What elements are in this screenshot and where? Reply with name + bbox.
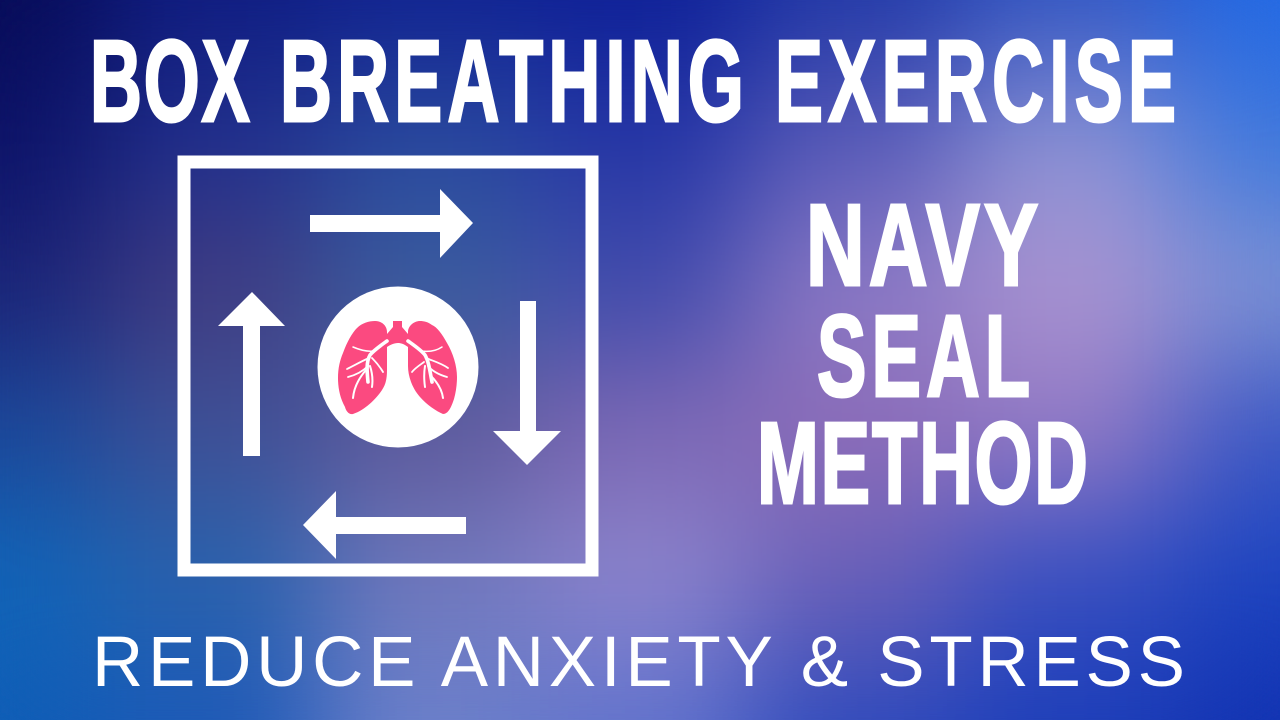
title: EXERCISE	[775, 18, 1181, 146]
word: navy: NAVY	[806, 181, 1042, 310]
subtitle: REDUCE ANXIETY & STRESS	[92, 623, 1185, 702]
title: BOX	[90, 18, 251, 146]
heading: navy seal method	[757, 181, 1088, 528]
left lung	[338, 321, 387, 414]
word: seal: SEAL	[817, 291, 1030, 421]
arrow: up (left)	[218, 292, 285, 456]
icon: lungs	[318, 286, 478, 448]
title	[90, 18, 1181, 146]
title: BREATHING	[280, 18, 749, 146]
arrow: down (right)	[493, 301, 561, 465]
panel: breathing box diagram	[184, 162, 592, 570]
right lung	[408, 321, 457, 414]
box outline	[184, 162, 592, 570]
bronchi	[347, 341, 448, 398]
arrow: right (top)	[310, 189, 473, 258]
trachea	[387, 321, 408, 347]
icon background circle	[318, 286, 478, 448]
arrow: left (bottom)	[303, 491, 466, 559]
word: method: METHOD	[757, 398, 1088, 528]
